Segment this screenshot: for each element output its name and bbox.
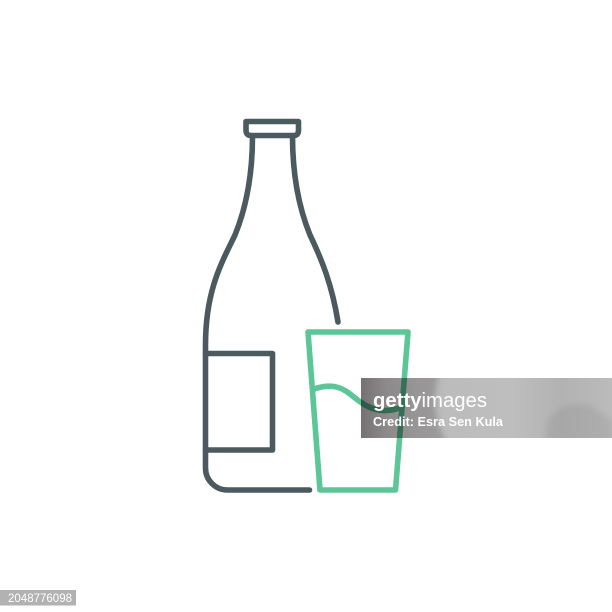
- bottle outline right: [292, 136, 338, 322]
- glass outline: [308, 332, 408, 490]
- watermark credit text: Credit: Esra Sen Kula: [373, 415, 504, 429]
- illustration and watermark: [0, 118, 612, 606]
- water surface: [314, 386, 402, 411]
- bottle cap: [246, 122, 298, 136]
- watermark shapes: [361, 378, 610, 438]
- watermark logo text: gettyimages: [373, 390, 487, 412]
- bottle outline left and base: [206, 136, 310, 490]
- watermark banner: [361, 378, 612, 438]
- icon: bottle: [206, 122, 338, 490]
- icon: glass of water: [308, 332, 408, 490]
- image id number: 2048776098: [8, 593, 72, 605]
- bottle label: [206, 354, 272, 450]
- image id tag: [0, 590, 76, 606]
